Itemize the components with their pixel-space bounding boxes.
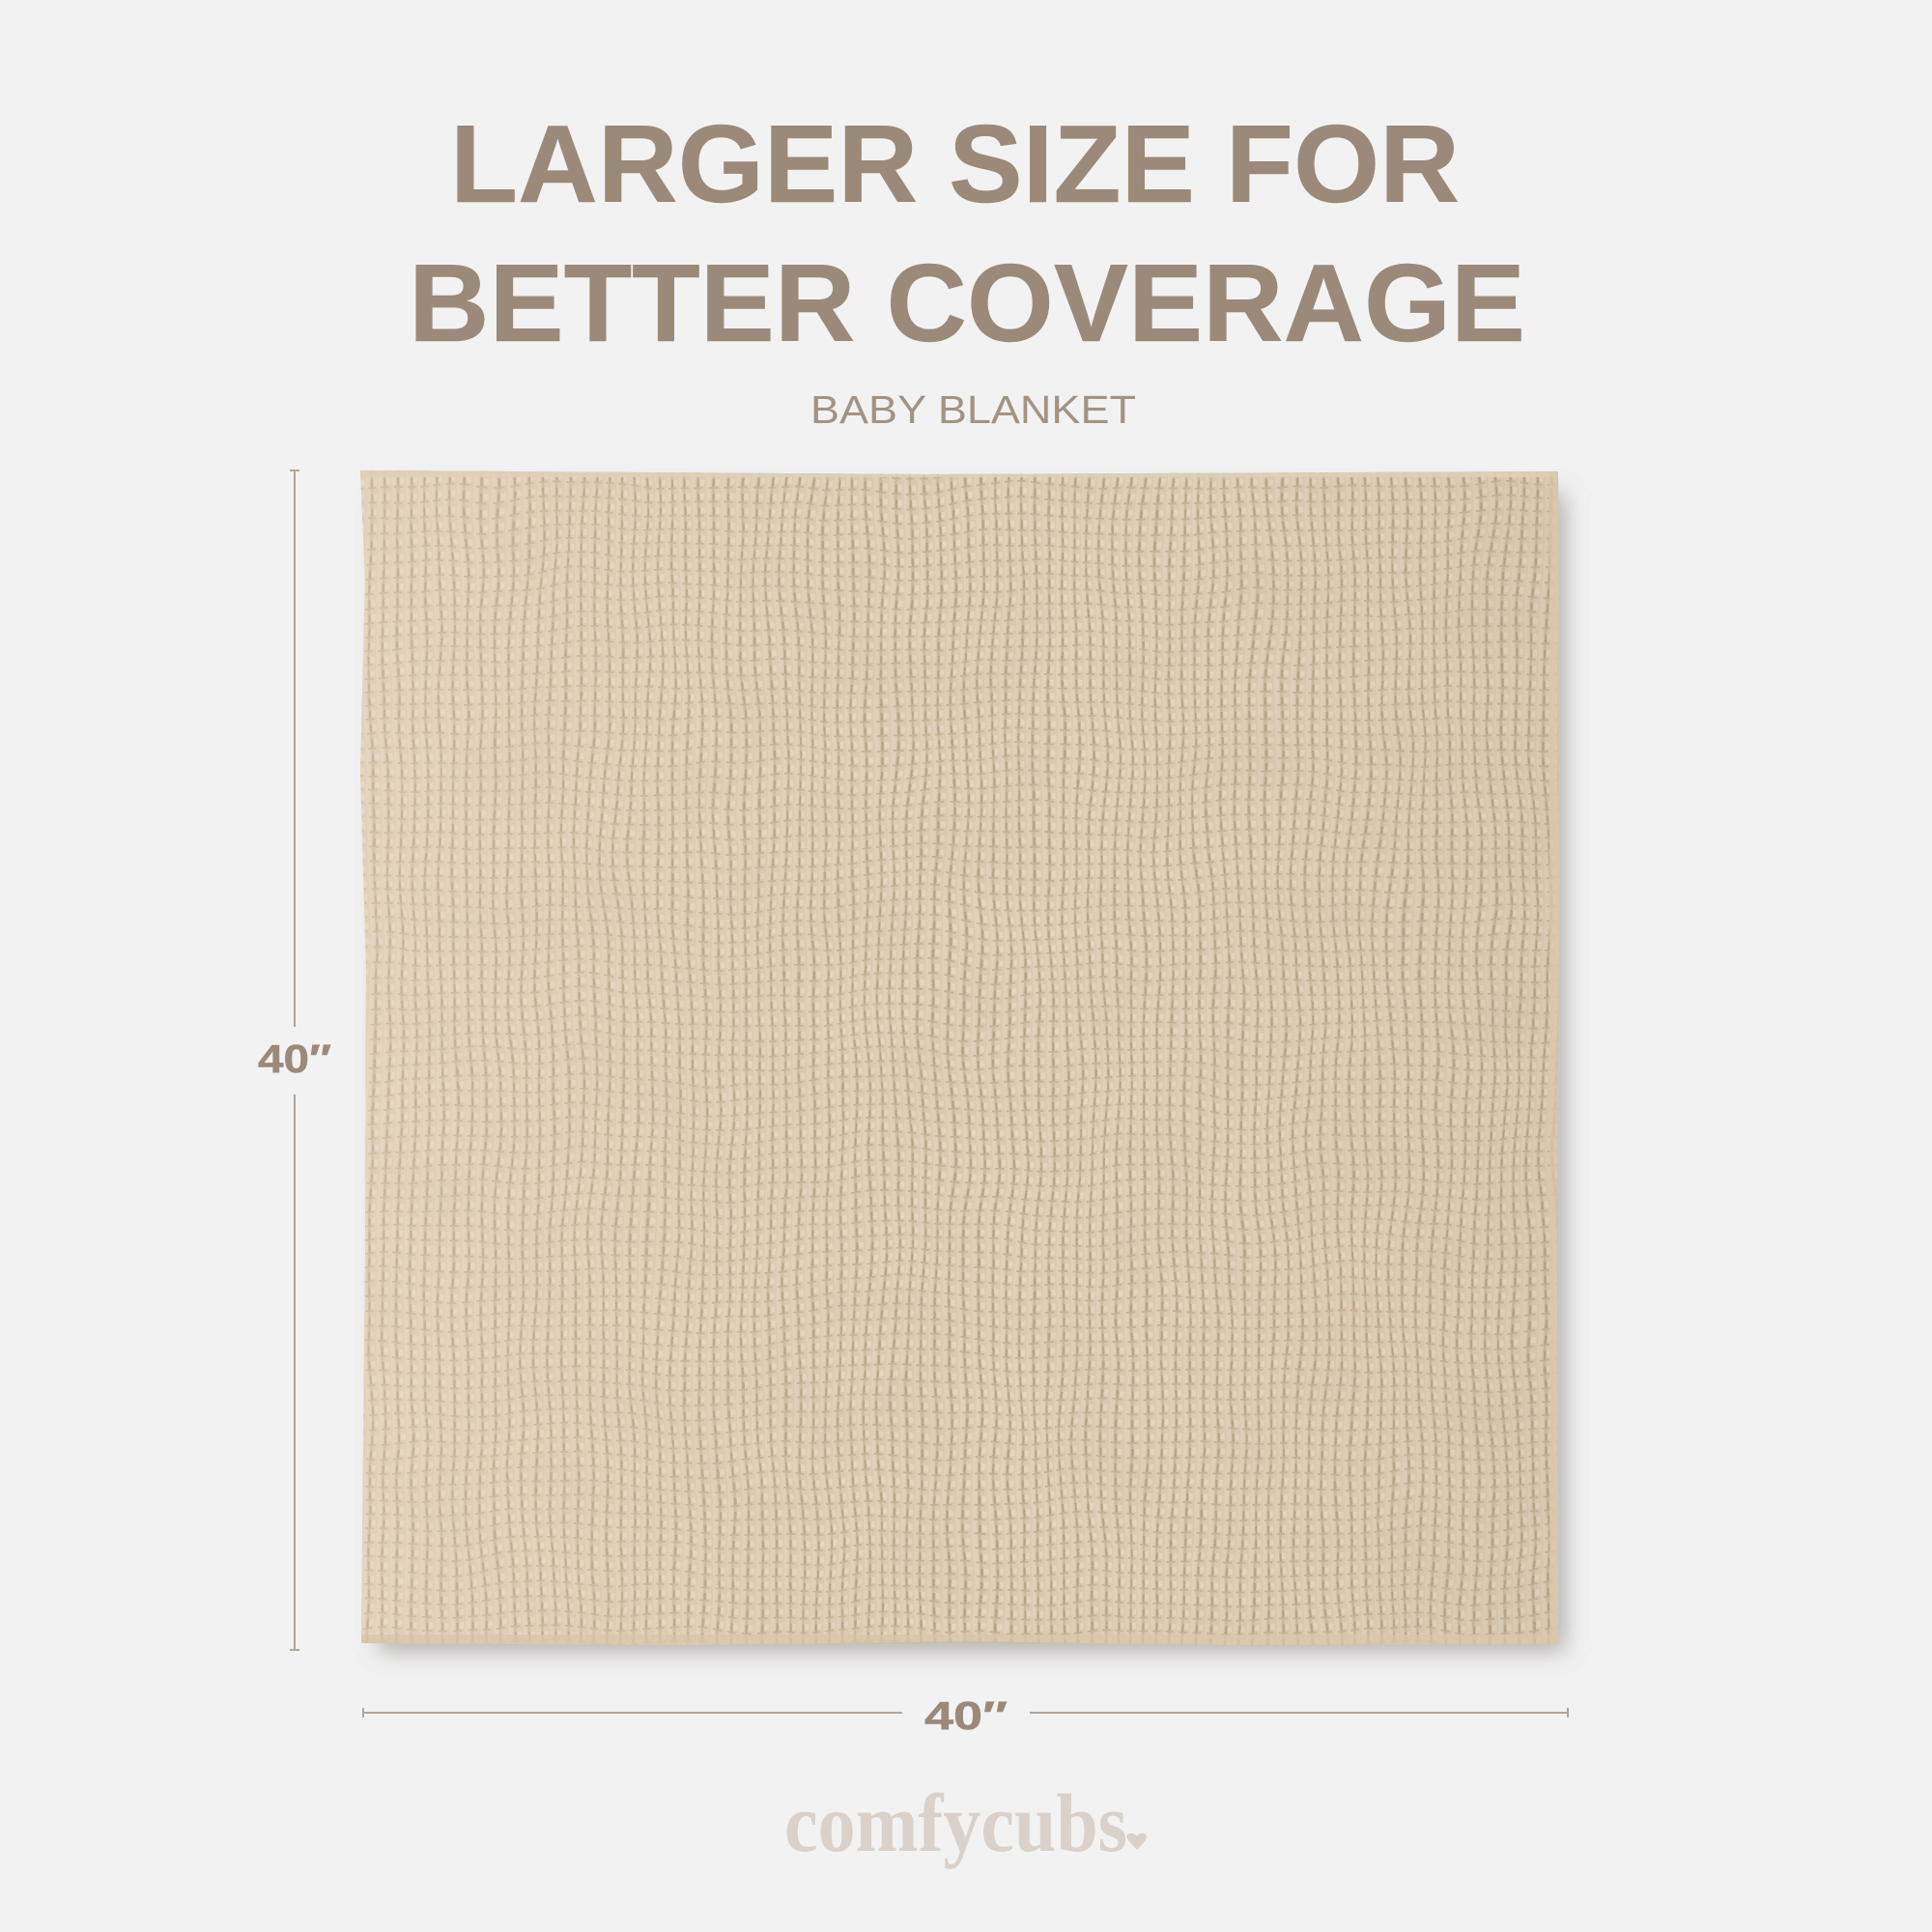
title: LARGER SIZE FOR: [450, 103, 1460, 226]
icon: heart: [1126, 1833, 1147, 1850]
horizontal dimension: 40 inches: 40″: [924, 1693, 1008, 1738]
vertical dimension: 40 inches: 40″: [258, 1037, 331, 1081]
blanket fabric: [328, 440, 1590, 1676]
infographic canvas: [258, 124, 1578, 1869]
title: [409, 103, 1525, 365]
blanket shadow: [379, 493, 1565, 1652]
title: BETTER COVERAGE: [409, 242, 1525, 365]
blanket product photo: [328, 440, 1590, 1676]
subtitle: BABY BLANKET: [810, 387, 1136, 432]
logo: comfycubs: comfycubs: [784, 1776, 1127, 1869]
